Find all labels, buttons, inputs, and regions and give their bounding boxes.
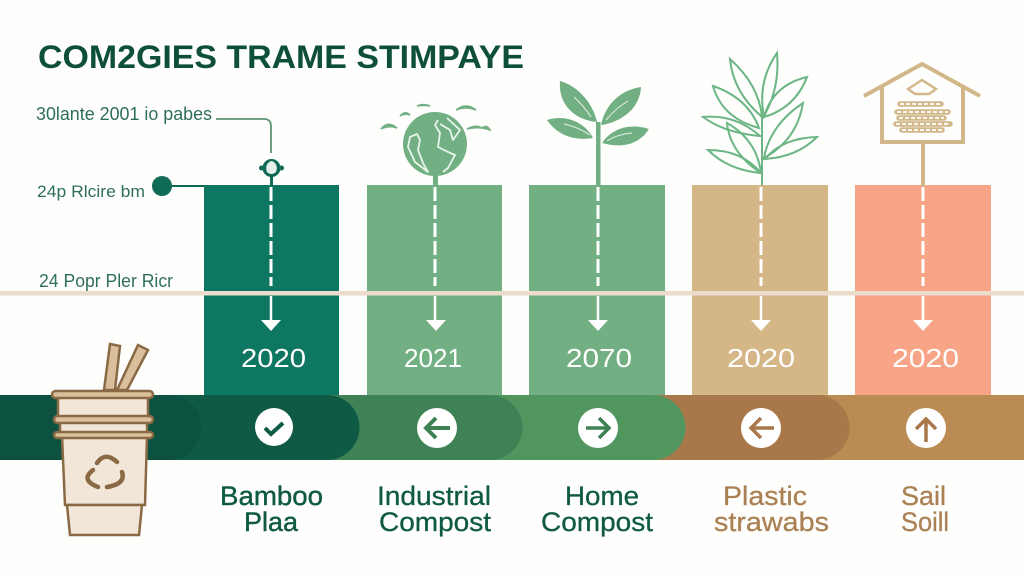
bar: Plastic straws 2020 xyxy=(692,185,828,396)
callout: middle label with dot: 24p Rlcire bm xyxy=(37,182,145,201)
icon: left arrow green xyxy=(417,408,457,448)
callout: top label with connector xyxy=(36,104,271,153)
icon: bamboo plant outline xyxy=(703,53,817,185)
title: COM2GIES TRAME STIMPAYE xyxy=(38,39,524,75)
icon: globe with birds xyxy=(381,104,490,186)
label: Industrial Compost: Compost xyxy=(379,507,492,537)
bar: Soil 2020: 2020 xyxy=(892,343,959,373)
label: Plastic strawabs xyxy=(714,481,829,537)
label: Home Compost: Home xyxy=(565,481,639,511)
label: Bamboo Plaa: Plaa xyxy=(244,507,299,537)
icon: recyclable cup with straws xyxy=(52,344,153,535)
label: Plastic strawabs: Plastic xyxy=(723,481,807,511)
band: timeline ribbon xyxy=(0,395,1024,460)
icon: sprout xyxy=(547,81,649,186)
label: Bamboo Plaa xyxy=(220,481,323,537)
bar: Industrial Compost 2021 xyxy=(367,185,502,396)
label: Plastic strawabs: strawabs xyxy=(714,507,829,537)
icon: up arrow tan xyxy=(906,408,946,448)
icon: house with stacked fibres xyxy=(864,64,980,186)
callout: middle label with dot xyxy=(37,176,206,201)
bar: Soil 2020 xyxy=(855,185,991,396)
callout: top label with connector: 30lante 2001 io pabes xyxy=(36,104,212,124)
bar: Plastic straws 2020: 2020 xyxy=(727,343,795,373)
bar: Home Compost 2070: 2070 xyxy=(566,343,632,373)
icon: left arrow tan xyxy=(741,408,781,448)
bar: Home Compost 2070 xyxy=(529,185,665,396)
label: lower axis: 24 Popr Pler Ricr xyxy=(39,271,173,291)
bar: Bamboo 2020 xyxy=(204,185,339,396)
label: Sail Soill xyxy=(901,481,949,537)
bar: Industrial Compost 2021: 2021 xyxy=(404,343,462,373)
label: Home Compost xyxy=(541,481,654,537)
label: Home Compost: Compost xyxy=(541,507,654,537)
label: Bamboo Plaa: Bamboo xyxy=(220,481,323,511)
label: Industrial Compost xyxy=(377,481,492,537)
icon: small leaf badge xyxy=(259,159,284,186)
label: Industrial Compost: Industrial xyxy=(377,481,491,511)
icon: right arrow green xyxy=(578,408,618,448)
bar: Bamboo 2020: 2020 xyxy=(241,343,306,373)
icon: check xyxy=(255,408,293,446)
label: Sail Soill: Soill xyxy=(901,507,949,537)
label: Sail Soill: Sail xyxy=(901,481,946,511)
